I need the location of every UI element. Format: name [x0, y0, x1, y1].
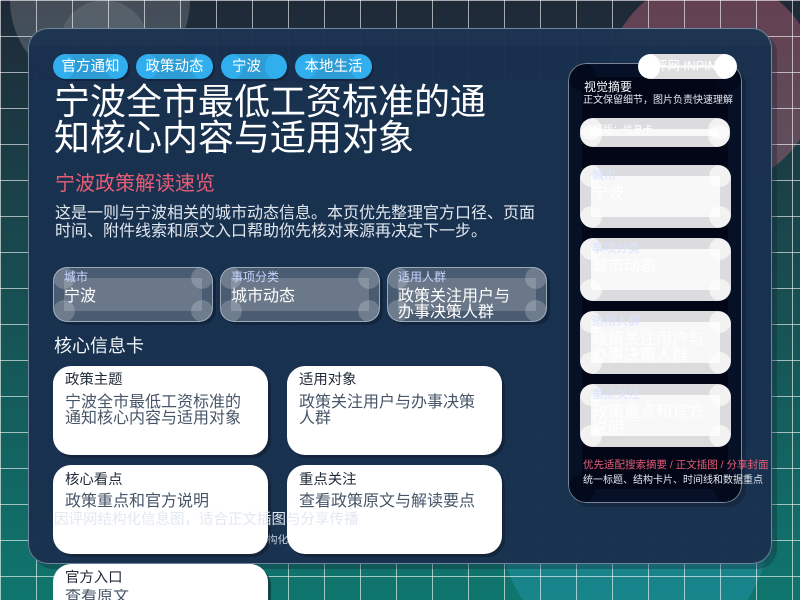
stat: 城市: 宁波: [64, 288, 96, 305]
info card: 重点关注: 查看政策原文与解读要点: [299, 493, 475, 510]
decorative circle: top left: [10, 0, 190, 90]
info card: 重点关注: 重点关注: [299, 472, 357, 488]
mini card: 重点关注: 政策重点和官方: [592, 404, 704, 421]
stat: 适用人群: 适用人群: [398, 270, 446, 284]
info card: 政策主题: 宁波全市最低工资标准的通知核心内容与适用对象: [65, 394, 241, 427]
mini card: 重点关注: 重点关注: [592, 387, 640, 401]
panel note: pink: 优先适配搜索摘要 / 正文插图 / 分享封面: [583, 459, 769, 471]
tag: 官方通知: [53, 54, 128, 79]
mini card: template: [580, 118, 730, 147]
footer caption: 因评网结构化信息图，适合正文插图与分享传播: [54, 512, 358, 528]
tag: 政策动态: [136, 54, 213, 79]
stat: 城市: [53, 267, 213, 322]
stat: 事项分类: [220, 267, 380, 322]
info card: 适用对象: [287, 366, 502, 455]
decorative circle: top left inner: [60, 0, 148, 88]
mini card: template: 模版：信息卡: [593, 125, 653, 136]
stat: 适用人群: 政策关注用户与: [398, 288, 510, 305]
decorative circle: top right pink: [607, 0, 800, 187]
title: 宁波全市最低工资标准的通: [54, 81, 486, 122]
info card: 重点关注: [287, 465, 502, 554]
panel: visual summary: [568, 63, 742, 503]
info card: 适用对象: 适用对象: [299, 372, 357, 388]
stat: 城市: 城市: [64, 270, 88, 284]
panel heading: 视觉摘要: [584, 80, 632, 94]
info card: 核心看点: [53, 465, 268, 554]
panel note: grey: 统一标题、结构卡片、时间线和数据重点: [583, 475, 763, 486]
mini card: 城市: 城市: [592, 168, 616, 182]
info card: 政策主题: 政策主题: [65, 372, 123, 388]
info card: 核心看点: 核心看点: [65, 472, 123, 488]
badge: brand: 因评网 INPIN 图: [642, 59, 733, 73]
info card: 政策主题: [53, 366, 268, 455]
tag: 本地生活: [295, 54, 372, 79]
title: [54, 81, 486, 158]
mini card: 适用人群: 适用人群: [592, 314, 640, 328]
mini card: 事项分类: 城市动态: [592, 258, 656, 275]
badge: brand: [638, 54, 737, 79]
title: 知核心内容与适用对象: [54, 117, 414, 158]
mini card: 城市: 宁波: [592, 185, 624, 202]
mini card: 城市: [580, 165, 731, 228]
tag: 本地生活: 本地生活: [304, 59, 362, 75]
panel subheading: 正文保留细节，图片负责快速理解: [583, 95, 733, 106]
mini card: 适用人群: 政策关注用户与: [592, 331, 704, 348]
stat: 事项分类: 事项分类: [231, 270, 279, 284]
tag: 政策动态: 政策动态: [146, 59, 204, 75]
heading: 核心信息卡: 核心信息卡: [54, 336, 144, 356]
mini card: 重点关注: 说明: [592, 420, 624, 437]
mini card: 适用人群: 办事决策人群: [592, 347, 688, 364]
mini card: 适用人群: [580, 311, 731, 374]
info card: 官方入口: 官方入口: [65, 570, 123, 586]
tag: 宁波: [221, 54, 287, 79]
subtitle: 宁波政策解读速览: [55, 173, 215, 195]
footer note behind cards: 构化: [267, 534, 288, 546]
info card: 适用对象: 政策关注用户与办事决策人群: [299, 394, 475, 427]
stat: 适用人群: [387, 267, 547, 322]
tag: 官方通知: 官方通知: [62, 59, 120, 75]
mini card: 事项分类: 事项分类: [592, 241, 640, 255]
decorative circle: bottom teal: [500, 390, 770, 600]
description: 这是一则与宁波相关的城市动态信息。本页优先整理官方口径、页面: [55, 205, 535, 222]
mini card: 重点关注: [580, 384, 731, 447]
info card: 核心看点: 政策重点和官方说明: [65, 493, 209, 510]
tag: 宁波: 宁波: [232, 59, 261, 75]
description: [55, 204, 535, 240]
mini card: 事项分类: [580, 238, 731, 301]
stat: 适用人群: 办事决策人群: [398, 304, 494, 321]
info card: 官方入口: [53, 564, 268, 600]
stat: 事项分类: 城市动态: [231, 288, 295, 305]
description: 时间、附件线索和原文入口帮助你先核对来源再决定下一步。: [55, 223, 487, 240]
